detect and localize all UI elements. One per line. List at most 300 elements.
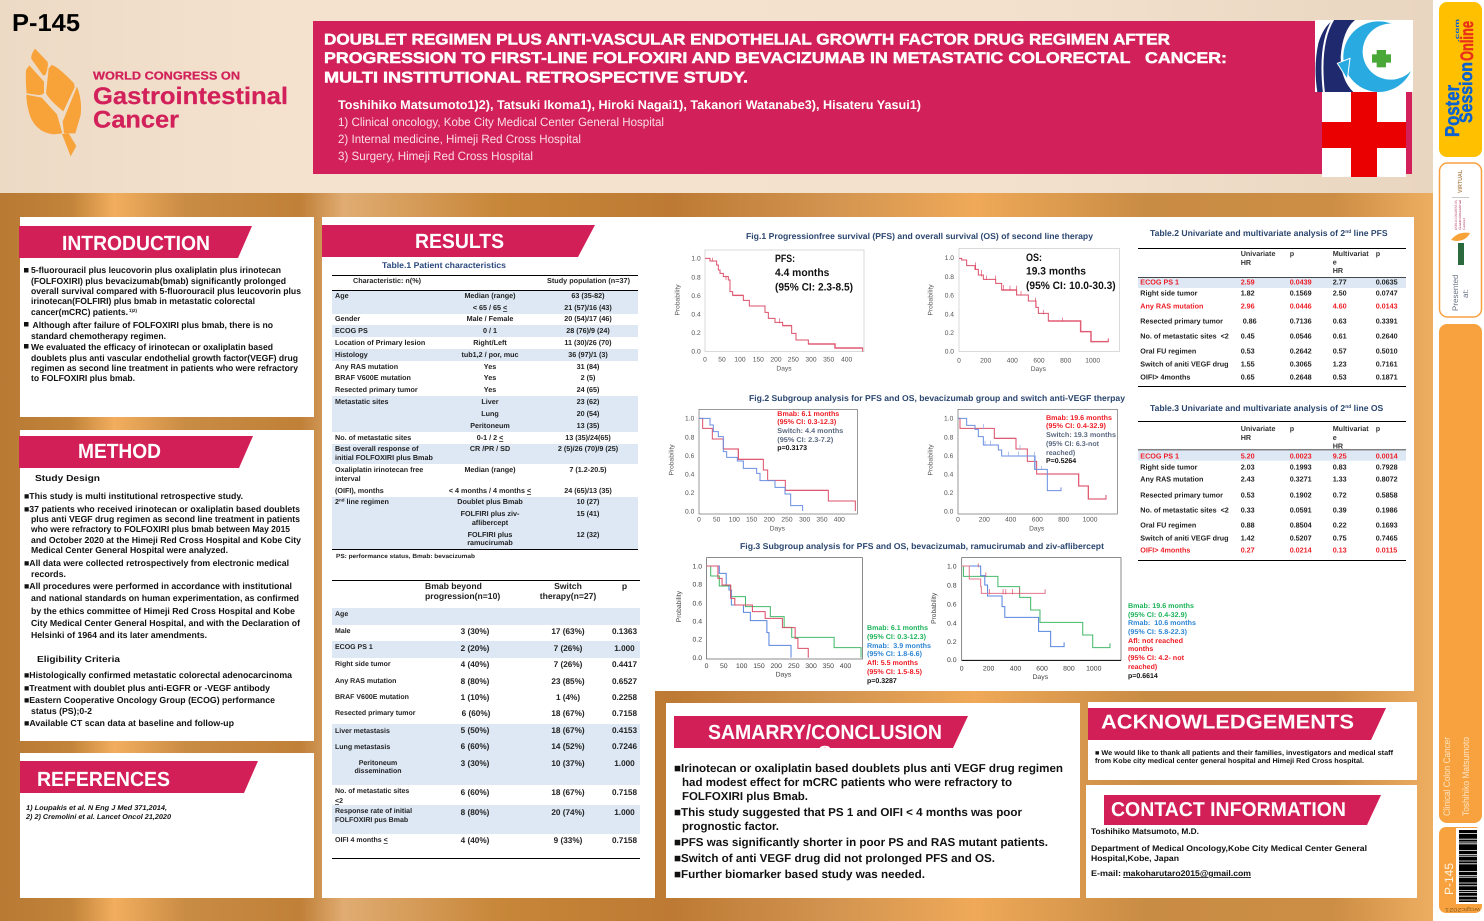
table 1 third column: 23 (62)	[577, 397, 600, 406]
figure 3 PFS annotation: Rmab: 3.9 months	[867, 642, 931, 650]
table 1 second column: Doublet plus Bmab	[457, 497, 523, 506]
table 1 header and first column	[335, 276, 631, 506]
affiliations: 1) Clinical oncology, Kobe City Medical Center General Hospital	[338, 115, 664, 129]
comparison table labels: FOLFOXIRI pus Bmab	[335, 816, 408, 824]
chart: figure 3 PFS subgroup: 250	[788, 662, 800, 670]
table 2: PFS analysis	[1138, 228, 1406, 387]
chart: figure 3 PFS subgroup: 1.0	[692, 563, 702, 570]
table 1 footnote: PS: performance status, Bmab: bevacizumab	[336, 553, 475, 560]
small congress name	[1454, 199, 1466, 230]
chart: figure 3 OS subgroup: 0.2	[947, 638, 957, 646]
sidebar: presented at box: VIRTUAL	[1457, 170, 1464, 193]
figure 2 title: Fig.2 Subgroup analysis for PFS and OS, bevacizumab group and switch anti-VEGF therpay	[749, 393, 1125, 403]
comparison table labels: ECOG PS 1	[335, 644, 373, 651]
table 1 third column: 24 (65)	[577, 385, 600, 394]
comparison table values: 0.7158	[612, 836, 637, 845]
chart: figure 1 PFS: 400	[841, 356, 852, 363]
table 1 second column: 0 / 1	[483, 326, 497, 335]
chart: figure 1 OS: Days	[1031, 365, 1046, 373]
table 3 body: OIFI> 4months	[1140, 545, 1190, 554]
table 1 header and first column: nd	[339, 498, 345, 502]
comparison table values: 1 (4%)	[556, 693, 580, 702]
table 2 body: Resected primary tumor	[1140, 317, 1223, 326]
introduction text	[24, 265, 301, 383]
chart: figure 1 OS: 800	[1060, 357, 1071, 364]
table 2 body: 1.23	[1333, 359, 1347, 368]
figure 2 OS annotation: P=0.5264	[1046, 458, 1076, 465]
chart: figure 1 PFS: 0.6	[691, 292, 701, 300]
comparison table values: 8 (80%)	[461, 677, 490, 686]
OS annotation: 19.3 months	[1026, 265, 1086, 277]
method text	[24, 473, 301, 728]
comparison table rules	[332, 580, 640, 859]
chart: figure 2 PFS subgroup: 100	[729, 516, 740, 523]
small green logo	[1458, 243, 1464, 265]
chart: figure 2 PFS subgroup: 350	[816, 516, 828, 523]
badge wordmark: Online	[1457, 21, 1477, 61]
table 2 body: 2.50	[1333, 289, 1347, 298]
introduction text: 1)2)	[129, 308, 138, 313]
table 3 title: nd	[1345, 404, 1351, 410]
table 1 header and first column: Gender	[335, 314, 360, 323]
chart: figure 1 PFS: 100	[734, 356, 746, 363]
table 1 second column: aflibercept	[472, 518, 509, 527]
table 3 body: Right side tumor	[1140, 463, 1198, 472]
table 2 body: Switch of aniti VEGF drug	[1140, 359, 1229, 368]
table 2 rules	[1138, 248, 1406, 387]
table 2 body: 0.0446	[1290, 301, 1312, 310]
chart: figure 3 OS subgroup: Probability	[930, 593, 938, 624]
table 2 header: HR	[1241, 258, 1252, 267]
conclusion text: FOLFOXIRI plus Bmab.	[682, 791, 808, 803]
table 2 body: 0.0635	[1376, 277, 1398, 286]
table 3 body: 1.33	[1333, 474, 1347, 483]
heading: method: METHOD	[78, 440, 161, 463]
conclusion text: ■This study suggested that PS 1 and OIFI < 4 months was poor	[674, 807, 1023, 819]
chart: figure 2 OS subgroup	[927, 409, 1117, 532]
figure 3 OS annotation: (95% CI: 0.4-32.9)	[1128, 611, 1187, 619]
chart: figure 2 PFS subgroup: 300	[799, 516, 810, 523]
table 2 body: 0.2640	[1376, 331, 1398, 340]
chart: figure 1 PFS: 350	[823, 356, 834, 363]
method text: status (PS);0-2	[31, 706, 92, 716]
figure 3 OS annotation	[1128, 602, 1196, 680]
chart: figure 1 PFS	[674, 250, 864, 372]
table 1 header and first column: ECOG PS	[335, 326, 368, 335]
table 3 title: Table.3 Univariate and multivariate analysis of 2	[1150, 403, 1345, 413]
comparison table header	[425, 581, 627, 601]
table 1 third column: 13 (35)	[577, 421, 600, 430]
figure 3 PFS annotation: (95% CI: 1.5-8.5)	[867, 668, 922, 676]
table 2 body: 0.53	[1241, 347, 1255, 356]
chart: figure 3 OS subgroup: 0.0	[947, 656, 957, 664]
chart: figure 3 PFS subgroup: 400	[840, 662, 851, 670]
table 3 body: 0.1693	[1376, 521, 1398, 530]
PFS annotation	[775, 252, 853, 293]
contact details	[1091, 827, 1367, 878]
introduction text: to FOLFOXIRI plus bmab.	[31, 373, 135, 383]
heading: method	[19, 436, 253, 468]
chart: figure 3 OS subgroup: 600	[1036, 665, 1048, 672]
chart: figure 1 PFS: 0.8	[691, 274, 701, 281]
barcode	[1456, 828, 1482, 904]
table 2 body: 0.3065	[1290, 359, 1312, 368]
figure 3 PFS annotation: Afl: 5.5 months	[867, 659, 918, 667]
comparison table values: 3 (30%)	[461, 759, 490, 768]
comparison table labels: Peritoneum	[359, 759, 397, 767]
table 1 third column: 11 (30)/26 (70)	[564, 338, 612, 347]
figure 2 PFS annotation: (95% CI: 2.3-7.2)	[777, 436, 833, 444]
table 2 body: 2.59	[1241, 277, 1255, 286]
comparison table values: 20 (74%)	[551, 808, 585, 817]
table 3 body: 0.0115	[1376, 545, 1397, 554]
contact details: E-mail:	[1091, 869, 1121, 878]
table 1 third column: 2 (5)/26 (70)/9 (25)	[558, 444, 619, 453]
comparison table values: 0.4417	[612, 660, 637, 669]
session and author labels: Clinical Colon Cancer	[1442, 737, 1453, 816]
table 2 body: 0.0439	[1290, 277, 1312, 286]
comparison table values: 10 (37%)	[551, 759, 585, 768]
method text: Helsinki of 1964 and its later amendments.	[31, 630, 207, 640]
table 1: patient characteristics	[332, 260, 638, 560]
session and author labels	[1442, 737, 1472, 816]
affiliations	[338, 115, 664, 163]
sidebar: session tab	[1439, 324, 1482, 823]
heading: references: REFERENCES	[37, 768, 170, 791]
figure 2 PFS annotation	[777, 410, 843, 452]
figure 3 PFS annotation: (95% CI: 1.8-6.6)	[867, 650, 922, 658]
contact details: makoharutaro2015@gmail.com	[1123, 869, 1251, 878]
table 3 body: 0.27	[1241, 545, 1255, 554]
method text: plus anti VEGF drug regimen as second line treatment in patients	[31, 514, 300, 524]
introduction text: standard chemotherapy regimen.	[31, 331, 166, 341]
comparison table values: 1 (10%)	[461, 693, 490, 702]
comparison table values	[461, 627, 637, 845]
table 2 body: No. of metastatic sites <2	[1140, 331, 1229, 340]
table 1 header and first column: (OIFI), months	[335, 486, 384, 495]
table 1 third column: 15 (41)	[577, 509, 600, 518]
figure 2 PFS annotation: Bmab: 6.1 months	[777, 410, 839, 418]
logo wordmark: WORLD CONGRESS ON	[93, 70, 240, 82]
table 2 header: e	[1333, 258, 1337, 266]
badge wordmark	[1442, 19, 1477, 137]
table 3 body	[1140, 451, 1398, 554]
chart: figure 1 PFS: 0	[703, 356, 707, 363]
comparison table labels: No. of metastatic sites	[335, 787, 409, 795]
table 1 third column: 21 (57)/16 (43)	[564, 303, 612, 312]
panel: method	[19, 430, 314, 741]
comparison table values: 7 (26%)	[554, 644, 583, 653]
figure 2 PFS annotation: Switch: 4.4 months	[777, 427, 843, 435]
table 3 title: line OS	[1351, 403, 1384, 413]
introduction text: cancer(mCRC) patients.	[31, 307, 128, 317]
chart: figure 2 OS subgroup: 400	[1005, 516, 1016, 523]
table 1 header and first column: Location of Primary lesion	[335, 338, 425, 347]
chart: figure 1 OS: 0	[957, 357, 961, 364]
method text: who were refractory to FOLFOXIRI plus bmab between May 2015	[30, 524, 290, 534]
table 2 body: 2.96	[1241, 301, 1255, 310]
comparison table header: therapy(n=27)	[540, 591, 596, 601]
chart: figure 2 OS subgroup: 800	[1058, 516, 1069, 523]
OS annotation: (95% CI: 10.0-30.3)	[1026, 279, 1116, 291]
table 3 body: 2.43	[1241, 474, 1255, 483]
table 1 second column: Peritoneum	[470, 421, 510, 430]
table 2 body: 0.1871	[1376, 372, 1398, 381]
chart: figure 2 PFS subgroup: 1.0	[685, 415, 694, 422]
chart: figure 3 OS subgroup: 0.8	[947, 582, 957, 589]
table 1 second column	[449, 291, 531, 547]
table 2 body: 0.86	[1243, 317, 1257, 326]
table 2 body: 4.60	[1333, 301, 1347, 310]
table 3 body: Resected primary tumor	[1140, 491, 1223, 500]
chart: figure 1 OS	[927, 248, 1119, 373]
table 1 header and first column: 2	[335, 497, 339, 506]
chart: figure 3 OS subgroup: 400	[1010, 665, 1021, 672]
table 2 body: 0.65	[1241, 372, 1255, 381]
title	[324, 32, 1227, 86]
chart: figure 2 PFS subgroup: 0.6	[685, 452, 694, 460]
table 3 body: Any RAS mutation	[1140, 474, 1203, 483]
figure 3 PFS annotation: (95% CI: 0.3-12.3)	[867, 633, 926, 641]
table 3 body: 0.0014	[1376, 451, 1398, 460]
contact details: Department of Medical Oncology,Kobe City Medical Center General	[1091, 844, 1367, 853]
comparison table values: 5 (50%)	[461, 726, 490, 735]
table 3 body: Oral FU regimen	[1140, 521, 1196, 530]
method text: City Medical Center General Hospital, and with the Declaration of	[31, 618, 300, 628]
table 3 body: 0.7465	[1376, 533, 1398, 542]
chart: figure 2 PFS subgroup: 200	[764, 516, 775, 523]
logo wordmark	[93, 70, 288, 134]
comparison table values: 0.7158	[612, 788, 637, 797]
logo wordmark: Gastrointestinal	[93, 83, 288, 110]
table 2 body: 0.2648	[1290, 372, 1312, 381]
chart: figure 2 OS subgroup: 0.0	[944, 508, 953, 515]
PFS annotation: (95% CI: 2.3-8.5)	[775, 281, 853, 293]
method text: ■All procedures were performed in accordance with institutional	[24, 581, 292, 591]
conclusion text: ■Irinotecan or oxaliplatin based doublets plus anti VEGF drug regimen	[674, 763, 1063, 775]
heading: introduction: INTRODUCTION	[62, 232, 210, 255]
comparison table values: 4 (40%)	[461, 836, 490, 845]
session and author labels: Toshihiko Matsumoto	[1461, 737, 1472, 816]
chart: figure 2 PFS subgroup	[668, 409, 857, 532]
figure 3 OS annotation: Bmab: 19.6 months	[1128, 602, 1194, 610]
chart: figure 3 PFS subgroup: 200	[770, 662, 782, 670]
method text: Medical Center General Hospital were analyzed.	[31, 545, 228, 555]
table 2 body: 0.61	[1333, 331, 1347, 340]
PFS annotation: 4.4 months	[775, 266, 829, 278]
title: PROGRESSION TO FIRST-LINE FOLFOXIRI AND BEVACIZUMAB IN METASTATIC COLORECTAL CANCER:	[324, 50, 1227, 67]
icon: red cross logo	[1322, 92, 1406, 177]
table 1 third column: 7 (1.2-20.5)	[569, 465, 607, 474]
method text: ■37 patients who received irinotecan or oxaliplatin based doublets	[24, 504, 300, 514]
contact details: Toshihiko Matsumoto, M.D.	[1091, 827, 1199, 836]
table 1 third column: 28 (76)/9 (24)	[566, 326, 610, 335]
table 2 body: Any RAS mutation	[1140, 301, 1203, 310]
figure 2 OS annotation: Switch: 19.3 months	[1046, 431, 1116, 439]
table 2 body: Oral FU regimen	[1140, 347, 1196, 356]
table 3 body: 0.1986	[1376, 505, 1398, 514]
chart: figure 3 OS subgroup: 0.4	[947, 620, 957, 627]
chart: figure 1 PFS: 50	[718, 356, 726, 363]
comparison table values: 17 (63%)	[551, 627, 585, 636]
presented at label: at:	[1461, 289, 1470, 298]
figure 3 OS annotation: Rmab: 10.6 months	[1128, 619, 1196, 627]
comparison table values: 6 (60%)	[461, 742, 490, 751]
table 2 body: 0.5010	[1376, 347, 1398, 356]
table 1 header and first column: No. of metastatic sites	[335, 433, 411, 442]
table 2 body: ECOG PS 1	[1140, 277, 1179, 286]
table 2 body: 1.55	[1241, 359, 1255, 368]
chart: figure 1 PFS: 300	[805, 356, 817, 363]
presented at label	[1451, 275, 1470, 311]
table 3: OS analysis	[1138, 403, 1406, 561]
chart: figure 2 OS subgroup: 0.4	[944, 471, 953, 478]
congress logo	[26, 49, 288, 156]
table 2 header: p	[1376, 249, 1381, 258]
comparison table values: 0.1363	[612, 627, 637, 636]
conclusion text	[674, 763, 1063, 881]
table 3 body: Switch of aniti VEGF drug	[1140, 533, 1229, 542]
table 3 body: 0.33	[1241, 505, 1255, 514]
figure 3 title: Fig.3 Subgroup analysis for PFS and OS, bevacizumab, ramucirumab and ziv-aflibercept	[740, 541, 1104, 551]
poster number: P-145	[12, 10, 80, 37]
table 1 third column: 31 (84)	[577, 362, 600, 371]
comparison table values: 7 (26%)	[554, 660, 583, 669]
table 1 third column: 20 (54)/17 (46)	[564, 314, 612, 323]
table 3 body: 0.13	[1333, 545, 1347, 554]
icon: medical center logo	[1315, 19, 1419, 93]
conference code: wcgic2021	[1445, 906, 1481, 912]
table 3 rules	[1138, 421, 1406, 561]
conclusion text: ■PFS was significantly shorter in poor PS and RAS mutant patients.	[674, 837, 1048, 849]
chart: figure 2 PFS subgroup: 50	[713, 516, 720, 523]
chart: figure 3 PFS subgroup: 0.4	[692, 618, 702, 625]
table 2 body: 0.3391	[1376, 317, 1398, 326]
chart: figure 2 OS subgroup: 0.2	[944, 489, 953, 497]
chart: figure 3 PFS subgroup	[675, 558, 862, 678]
chart: figure 3 PFS subgroup: 150	[753, 662, 765, 670]
chart: figure 3 PFS subgroup: 300	[805, 662, 817, 670]
panel: summary and conclusion	[666, 703, 1080, 898]
chart: figure 3 PFS subgroup: 0.0	[692, 654, 702, 662]
table 1 second column: Median (range)	[464, 465, 516, 474]
comparison table values: 1.000	[614, 644, 635, 653]
chart: figure 3 PFS subgroup: 0.8	[692, 581, 702, 588]
small congress name: Cancer	[1462, 217, 1466, 230]
table 2 title: line PFS	[1351, 228, 1388, 238]
chart: figure 3 PFS subgroup: 100	[736, 662, 747, 670]
background: gold lower area	[0, 193, 1433, 921]
table 1 header and first column: initial FOLFOXIRI plus Bmab	[335, 453, 433, 462]
table 1 header and first column: BRAF V600E mutation	[335, 373, 411, 382]
PFS annotation: PFS:	[775, 252, 795, 264]
table 3 body: 0.5207	[1290, 533, 1312, 542]
comparison table header: progression(n=10)	[425, 591, 500, 601]
sidebar: presented at box	[1440, 163, 1482, 317]
table 1 second column: Male / Female	[467, 314, 513, 323]
introduction text: regimen as second line treatment in patients who were refractory	[31, 363, 298, 373]
table 3 body: 9.25	[1333, 451, 1347, 460]
table 2 body: 0.0747	[1376, 289, 1398, 298]
table 1 header and first column: Histology	[335, 350, 368, 359]
table 3 body: 0.7928	[1376, 463, 1398, 472]
figure 3 PFS annotation	[867, 624, 931, 685]
icon: small leaf	[1451, 233, 1470, 241]
chart: figure 1 OS: 1000	[1085, 357, 1100, 364]
comparison table values: 6 (60%)	[461, 788, 490, 797]
comparison table labels: <2	[335, 798, 343, 805]
comparison table labels: Lung metastasis	[335, 743, 390, 751]
table 2 title: Table.2 Univariate and multivariate analysis of 2	[1150, 228, 1345, 238]
comparison table values: 1.000	[614, 759, 635, 768]
panel: acknowledgements	[1088, 702, 1417, 780]
chart: figure 3 OS subgroup: 800	[1063, 665, 1075, 672]
chart: figure 1 OS: 0.6	[945, 292, 954, 299]
chart: figure 3 OS subgroup: 1000	[1086, 665, 1101, 672]
chart: figure 2 PFS subgroup: 0	[697, 516, 701, 523]
table 3 body: 1.42	[1241, 533, 1255, 542]
comparison table values: 0.4153	[612, 726, 637, 735]
comparison table shaded rows	[332, 608, 640, 834]
logo wordmark: Cancer	[93, 106, 179, 134]
heading: acknowledgements: ACKNOWLEDGEMENTS	[1101, 712, 1354, 734]
table 1 second column: ramucirumab	[467, 538, 513, 547]
chart: figure 1 PFS: Probability	[674, 284, 681, 316]
method text: ■All data were collected retrospectively from electronic medical	[24, 558, 289, 568]
figure 1 title: Fig.1 Progressionfree survival (PFS) and overall survival (OS) of second line therapy	[746, 231, 1093, 241]
table 2 header	[1241, 249, 1381, 275]
reference list	[25, 804, 171, 821]
panel: introduction	[19, 217, 314, 417]
table 1 shaded rows	[332, 290, 638, 549]
introduction text: overall survival compared with 5-fluorouracil plus leucovorin plus	[31, 286, 301, 296]
comparison table labels: Liver metastasis	[335, 727, 390, 735]
table 1 third column: 24 (65)/13 (35)	[564, 486, 612, 495]
comparison table values: 18 (67%)	[551, 726, 585, 735]
comparison table labels: Age	[335, 611, 348, 618]
conclusion text: prognostic factor.	[682, 821, 779, 833]
chart: figure 1 OS: 1.0	[945, 254, 954, 262]
table 1 header and first column: line regimen	[344, 497, 389, 506]
chart: figure 1 OS: 200	[980, 357, 991, 364]
chart: figure 2 OS subgroup: 1.0	[944, 415, 953, 422]
comparison table labels	[335, 611, 416, 844]
comparison table labels: Response rate of initial	[335, 807, 412, 815]
heading: acknowledgements	[1088, 708, 1386, 740]
table 3 header: HR	[1241, 433, 1252, 442]
table 3 body: 2.03	[1241, 463, 1255, 472]
table 3 body: ECOG PS 1	[1140, 451, 1179, 460]
table 1 second column: tub1,2 / por, muc	[461, 350, 519, 359]
comparison table values: 3 (30%)	[461, 627, 490, 636]
table 1 second column: CR /PR / SD	[470, 444, 510, 453]
poster id: P-145	[1442, 863, 1456, 895]
table 1 second column: Right/Left	[473, 338, 507, 347]
comparison table values: 23 (85%)	[551, 677, 585, 686]
comparison table values: 2 (20%)	[461, 644, 490, 653]
chart: figure 3 PFS subgroup: 0.6	[692, 600, 702, 607]
method text: ■Eastern Cooperative Oncology Group (ECOG) performance	[24, 695, 275, 705]
method text: by the ethics committee of Himeji Red Cross Hospital and Kobe	[31, 606, 295, 616]
method text: records.	[31, 569, 66, 579]
introduction text: We evaluated the efficacy of irinotecan or oxaliplatin based	[31, 342, 273, 352]
table 2 body: OIFI> 4months	[1140, 372, 1190, 381]
table 1 third column: 10 (27)	[577, 497, 600, 506]
table 1 second column: Median (range)	[464, 291, 516, 300]
introduction text: Although after failure of FOLFOXIRI plus bmab, there is no	[32, 320, 274, 330]
method text: ■Treatment with doublet plus anti-EGFR or -VEGF antibody	[24, 683, 270, 693]
chart: figure 2 OS subgroup: Probability	[927, 444, 934, 476]
